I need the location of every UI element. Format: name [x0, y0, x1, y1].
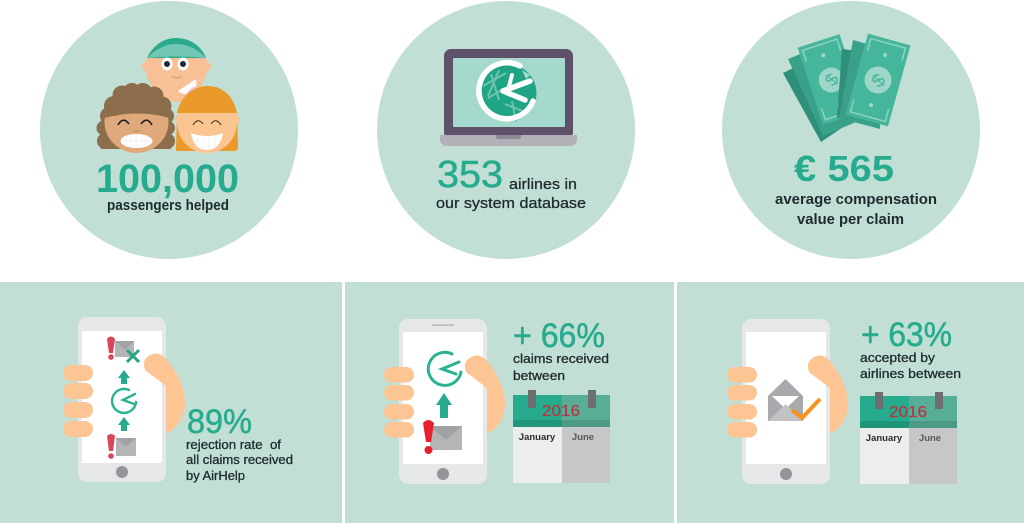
curly-haired face — [96, 83, 175, 153]
icon: calendar January to June 2016: January — [866, 433, 903, 444]
icon: phone held in hand — [63, 317, 185, 482]
icon: calendar January to June 2016 — [513, 390, 610, 483]
caption: accepted by airlines between: airlines between — [860, 366, 961, 381]
icon: rejected envelope — [107, 336, 139, 362]
caption: value per claim: value per claim — [797, 211, 904, 228]
orange-haired face — [174, 86, 240, 153]
caption: average compensation: average compensation — [775, 191, 937, 208]
right front bill: $ — [868, 70, 890, 92]
panel: airlines in database — [377, 1, 635, 259]
icon: envelope with alert — [423, 420, 462, 454]
icon: open envelope with check mark — [768, 379, 820, 421]
stat: € 565: € 565 — [794, 148, 894, 189]
icon: calendar January to June 2016: 2016 — [889, 404, 927, 421]
stat: 353: 353 — [437, 154, 503, 196]
panel: claims received — [345, 282, 674, 523]
icon: laptop with logo — [440, 49, 577, 146]
icon: three smiling passengers — [96, 38, 240, 153]
icon: calendar January to June 2016: 2016 — [542, 403, 580, 420]
icon: arrow up — [118, 370, 130, 384]
caption: rejection text: all claims received — [186, 453, 293, 467]
stat: + 63%: + 63% — [861, 316, 952, 354]
panel: accepted by airlines — [677, 282, 1024, 523]
icon: envelope with alert — [107, 434, 136, 459]
icon: arrow up — [436, 393, 452, 418]
caption: accepted by airlines between — [860, 350, 961, 381]
icon: calendar January to June 2016 — [860, 392, 957, 484]
caption: rejection text: by AirHelp — [186, 469, 245, 483]
icon: clock — [428, 352, 461, 385]
panel: average compensation — [722, 1, 980, 259]
caption: claims received between — [513, 351, 609, 383]
icon: calendar January to June 2016: January — [519, 432, 556, 443]
caption: airlines in: airlines in — [509, 176, 577, 193]
caption: claims received between: between — [513, 368, 565, 383]
stat: + 66%: + 66% — [513, 317, 605, 355]
icon: phone held in hand — [727, 319, 848, 484]
stat: 89%: 89% — [187, 403, 252, 441]
caption: passengers helped: passengers helped — [107, 198, 229, 214]
icon: clock — [112, 389, 136, 413]
panel: rejection rate — [0, 282, 342, 523]
caption: our system database: our system database — [436, 195, 586, 212]
panel: passengers helped — [40, 1, 298, 259]
caption: rejection text: rejection rate of — [186, 438, 282, 452]
icon: arrow up — [118, 417, 130, 431]
caption: claims received between: claims received — [513, 351, 609, 366]
stat: 100,000: 100,000 — [96, 157, 239, 201]
icon: banknotes — [783, 34, 910, 142]
icon: phone held in hand — [384, 319, 505, 484]
caption: accepted by airlines between: accepted by — [860, 350, 936, 365]
left front bill: $ — [821, 70, 843, 90]
top face — [142, 38, 211, 102]
icon: calendar January to June 2016: June — [919, 433, 941, 444]
caption: rejection text — [186, 438, 293, 483]
icon: calendar January to June 2016: June — [572, 432, 594, 443]
